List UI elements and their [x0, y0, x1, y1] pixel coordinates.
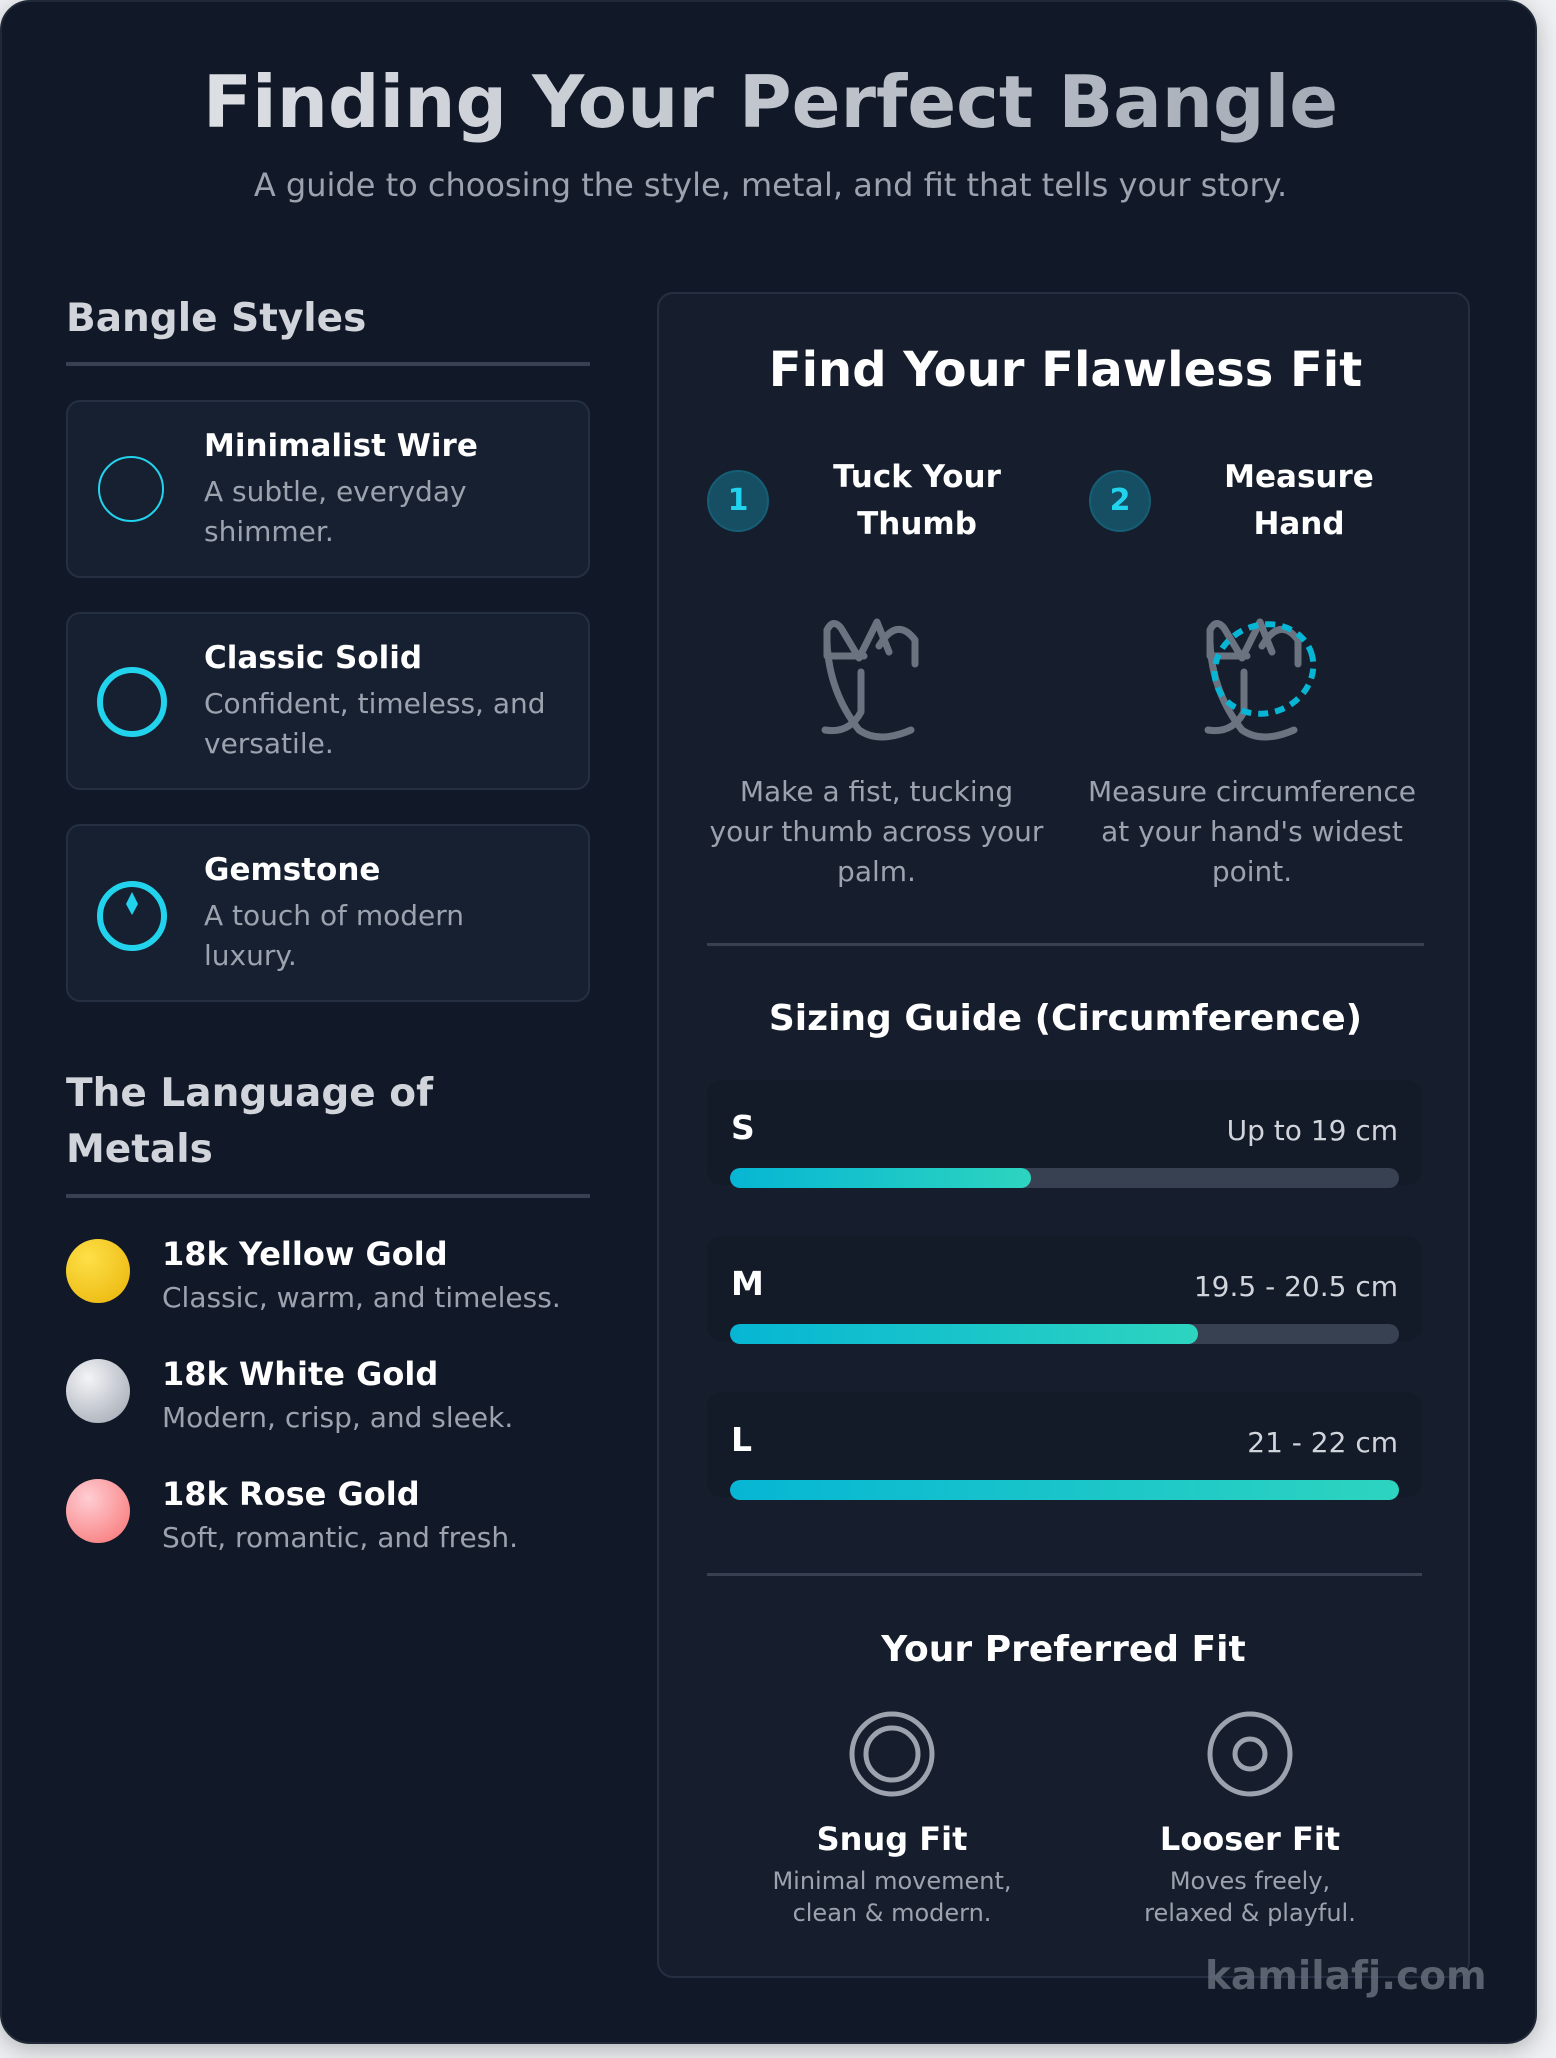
- size row M: M: [731, 1264, 764, 1303]
- step 2: [1089, 459, 1374, 542]
- metal: white gold: [66, 1355, 513, 1434]
- style card: gemstone: Gemstone: [204, 852, 380, 888]
- size row S: Up to 19 cm: [1227, 1114, 1398, 1147]
- size row L: 21 - 22 cm: [1247, 1426, 1398, 1459]
- heading: Bangle Styles: Bangle Styles: [66, 296, 366, 341]
- subtitle: A guide to choosing the style, metal, and fit that tells your story.: [254, 166, 1287, 204]
- fit: snug: Snug Fit: [817, 1820, 967, 1858]
- metal: white gold: Modern, crisp, and sleek.: [162, 1401, 513, 1434]
- heading: Bangle Styles: [66, 296, 590, 366]
- size row L: L: [731, 1420, 752, 1459]
- sizing heading: Sizing Guide (Circumference): [769, 998, 1362, 1039]
- size row S: [707, 1080, 1422, 1185]
- icon: snug rings: [850, 1712, 934, 1796]
- step 1: Tuck Your Thumb: [833, 459, 1001, 542]
- fit: snug: Minimal movement,: [772, 1867, 1012, 1895]
- fit: looser: Looser Fit: [1160, 1820, 1340, 1858]
- icon: thin ring: [98, 456, 164, 522]
- panel title: Find Your Flawless Fit: [769, 342, 1362, 398]
- style card: classic: [66, 612, 590, 790]
- icon: gem ring: [97, 881, 167, 951]
- style card: minimalist: A subtle, everyday shimmer.: [204, 475, 467, 548]
- step 2 description: Measure circumference at your hand's widest point.: [1088, 775, 1416, 888]
- style card: classic: Confident, timeless, and versatile.: [204, 687, 546, 760]
- icon: solid ring: [97, 667, 167, 737]
- step 2: 2: [1110, 483, 1130, 518]
- fit: snug: clean & modern.: [793, 1899, 991, 1927]
- metal: white gold: 18k White Gold: [162, 1355, 438, 1393]
- watermark: kamilafj.com: [1205, 1954, 1487, 1999]
- preferred fit heading: Your Preferred Fit: [881, 1629, 1246, 1670]
- icon: loose rings: [1208, 1712, 1292, 1796]
- metal: yellow gold: [66, 1235, 561, 1314]
- metal: rose gold: [66, 1475, 518, 1554]
- size row M: [707, 1236, 1422, 1341]
- title: Finding Your Perfect Bangle: [203, 60, 1338, 144]
- style card: gemstone: [66, 824, 590, 1002]
- step 2: Measure Hand: [1224, 459, 1374, 542]
- fit: looser: [1144, 1712, 1356, 1927]
- size row L: [707, 1392, 1422, 1497]
- style card: gemstone: A touch of modern luxury.: [204, 899, 464, 972]
- fit: looser: relaxed & playful.: [1144, 1899, 1356, 1927]
- style card: classic: Classic Solid: [204, 640, 422, 676]
- panel: fit: [657, 292, 1470, 1978]
- metal: rose gold: Soft, romantic, and fresh.: [162, 1521, 518, 1554]
- step 1 description: Make a fist, tucking your thumb across your palm.: [710, 775, 1043, 888]
- heading: metals: The Language of Metals: [66, 1071, 433, 1172]
- step 1: 1: [728, 483, 748, 518]
- style card: minimalist: [66, 400, 590, 578]
- size row S: S: [731, 1108, 755, 1147]
- step 1: [707, 459, 1001, 542]
- icon: fist: [822, 618, 918, 740]
- metal: yellow gold: 18k Yellow Gold: [162, 1235, 448, 1273]
- heading: metals: [66, 1066, 590, 1198]
- size row M: 19.5 - 20.5 cm: [1194, 1270, 1398, 1303]
- metal: yellow gold: Classic, warm, and timeless.: [162, 1281, 561, 1314]
- style card: minimalist: Minimalist Wire: [204, 428, 478, 464]
- fit: looser: Moves freely,: [1170, 1867, 1330, 1895]
- icon: fist measure: [1204, 618, 1316, 740]
- metal: rose gold: 18k Rose Gold: [162, 1475, 420, 1513]
- fit: snug: [772, 1712, 1012, 1927]
